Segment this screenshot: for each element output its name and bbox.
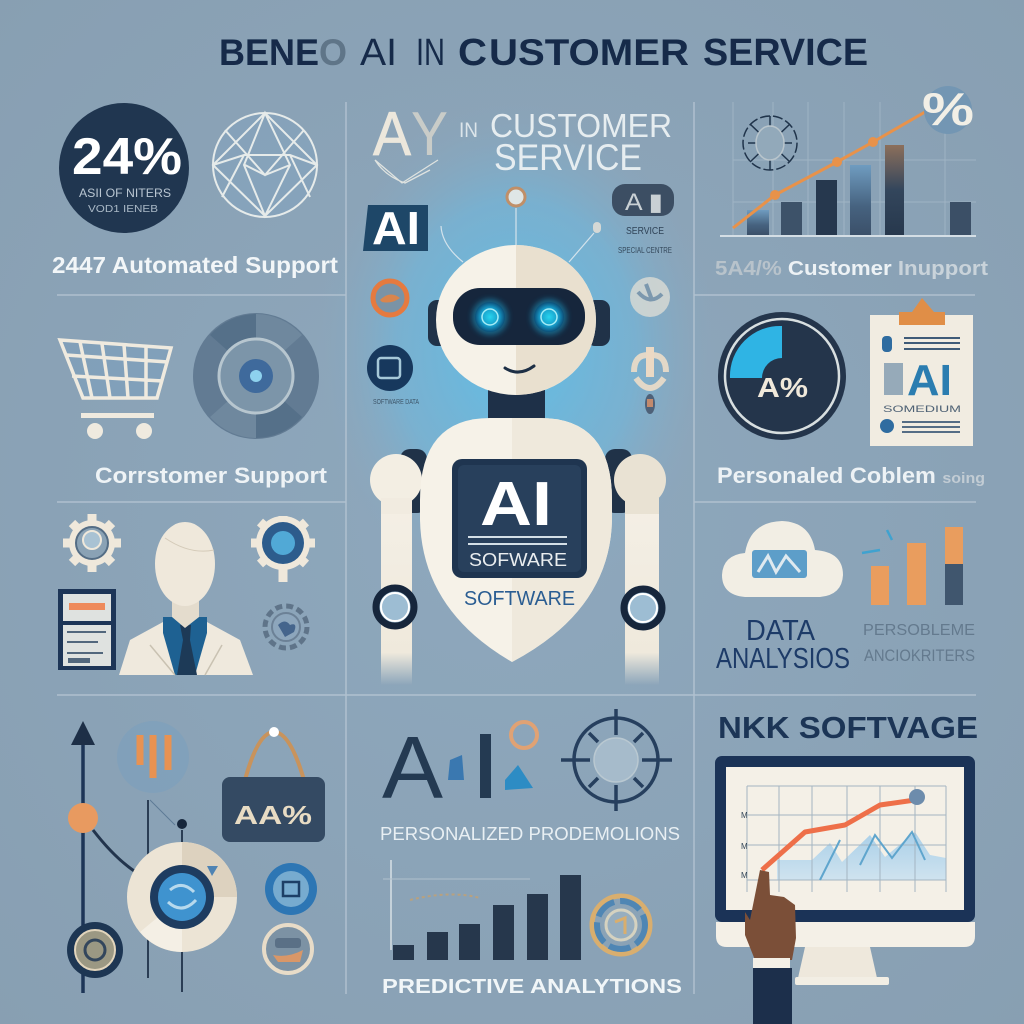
robot arms [370,449,666,685]
icon: shopping tag [222,727,325,842]
icon: small gear [265,606,307,648]
icon: wireframe globe [213,113,317,217]
icon: blue fragments [448,722,537,790]
chest screen [452,459,587,578]
icon: document [58,589,116,670]
heading: AY in customer service: SERVICE [494,137,642,178]
icon: gear disc [193,313,319,439]
label: muted captions [863,622,975,665]
panel: promotions timeline [67,721,325,993]
arrow: upward timeline [68,721,187,993]
heading: AY in customer service: IN [459,119,478,142]
title: BENEO [219,32,347,73]
heading: AY in customer service: Y [411,100,448,169]
icon: clipboard: AI [907,356,952,405]
icon: crosshair [561,709,672,811]
icon: dark ring badge [67,922,123,978]
title: USTOMER [489,32,689,73]
connectors [441,188,601,262]
icon: gauge: A% [757,372,808,403]
panel: customer support chart [715,83,988,280]
panel: data analysis [716,521,975,675]
icon: ring target [592,896,650,954]
icon: gauge [718,312,846,440]
robot neck [488,385,545,430]
icon: clipboard: SOMEDIUM [883,404,961,414]
chart: bars and trend [720,102,976,236]
label: customer support: 5A4/% Customer Inupport [715,258,988,280]
icon: clipboard [870,298,973,446]
panel: support agent [58,514,315,675]
dark pill icon: A ▮ [625,189,663,216]
title [219,32,868,74]
dark pill icon: SERVICE [626,226,664,237]
torso label: software: SOFTWARE [464,588,575,610]
robot torso [420,418,612,662]
icon: pale right top [630,277,670,317]
label: data analysis: DATA [746,615,816,647]
icon: navy circle [367,345,419,406]
panel: personalized [717,298,985,488]
icon: cream ring badge [264,925,312,973]
icon: monitor [715,756,975,985]
stat circle 24%: ASII OF NITERS [79,186,171,200]
title: AI [360,32,397,74]
title: IN [416,32,445,74]
label: muted captions: ANCIOKRITERS [864,646,975,665]
label: data analysis: ANALYSIOS [716,643,850,675]
line chart: M [741,871,748,880]
panel: 24% automated support [52,103,338,278]
icon: percent bubble: % [922,83,974,135]
icon: agent figure [119,522,253,675]
icon: orange ring [373,281,407,315]
bar chart: orange bars [862,527,963,605]
panel: software monitor [715,710,978,1024]
icon: eyes [472,299,567,335]
panel: personalized promotions [380,709,682,998]
dark pill icon: SPECIAL CENTRE [618,246,672,255]
heading: NKK softvage: NKK SOFTVAGE [718,710,978,745]
icon: shopping tag: AA% [234,800,312,830]
icon: cloud [722,521,843,597]
icon: gear left [63,514,121,572]
line chart [741,786,946,892]
label: muted captions: PERSOBLEME [863,622,975,639]
icon: pointing hand [745,870,796,1024]
stat circle 24% [59,103,189,233]
icon: spider network [743,116,797,170]
label: data analysis [716,615,850,675]
heading: A I [382,718,491,817]
icon: pie ring [127,842,237,952]
panel: center robot [363,100,674,685]
icon: navy circle: SOFTWARE DATA [373,399,419,406]
chest screen: SOFWARE [469,550,567,570]
icon: pale right lower [634,347,666,414]
icon: blue badge [265,863,317,915]
label: 2447 automated support: 2447 Automated Support [52,252,338,278]
dark pill icon [612,184,674,255]
heading: AY in customer service: CUSTOMER [490,107,672,144]
stat circle 24%: 24% [72,128,182,186]
icon: gear right [251,516,315,582]
icon: shopping cart [60,340,171,439]
line chart: M [741,842,748,851]
heading: A I: A [382,718,443,817]
stat circle 24%: VOD1 IENEB [88,204,158,215]
heading: AY in customer service [373,100,672,183]
label: personalized promotions: PERSONALIZED PRODEMOLIONS [380,824,680,844]
chest screen: AI [480,470,552,539]
bar chart: predictive [383,860,581,960]
title: SERVICE [703,32,868,74]
heading: AY in customer service: A [373,100,412,169]
label: predictive analytics: PREDICTIVE ANALYTIONS [382,976,682,998]
badge: AI: AI [372,202,420,254]
icon: orange glyph bubble [117,721,189,793]
robot head [428,245,610,395]
panel: customer support [60,313,328,488]
label: personalized problem solving: Personaled Coblem soing [717,463,985,488]
line chart: M [741,811,748,820]
title: C [458,32,487,74]
label: customer support: Corrstomer Support [95,463,328,488]
